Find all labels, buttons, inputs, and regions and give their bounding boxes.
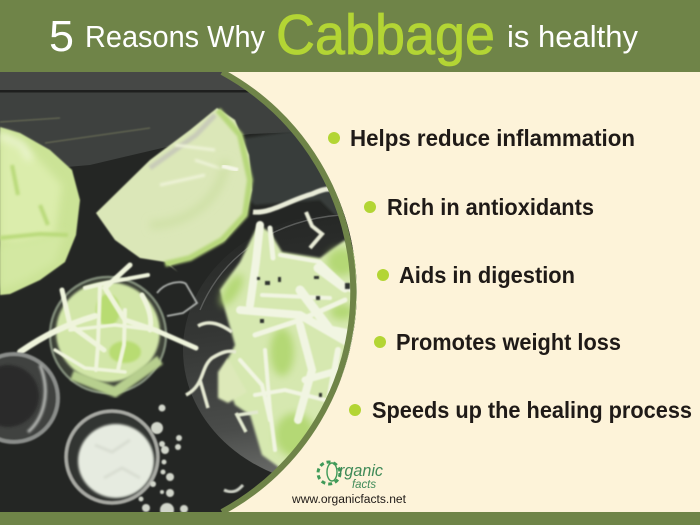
title: is healthy: is healthy bbox=[507, 19, 638, 54]
logo wordmark: rganic bbox=[339, 461, 383, 480]
salt bowl bbox=[66, 411, 158, 503]
bottom bar bbox=[0, 512, 700, 525]
plate bbox=[183, 214, 357, 472]
cabbage wedge bbox=[96, 108, 252, 272]
empty glass jar bbox=[0, 354, 58, 442]
logo: Organic Facts bbox=[318, 461, 383, 491]
cabbage head bbox=[0, 127, 80, 295]
photo: cabbage on slate bbox=[0, 72, 357, 512]
jar of shredded cabbage bbox=[20, 265, 197, 393]
benefit 2: Rich in antioxidants bbox=[387, 194, 594, 220]
benefit 3: Aids in digestion bbox=[399, 262, 575, 288]
title: Cabbage: Cabbage bbox=[276, 3, 495, 67]
logo tagline: facts bbox=[352, 477, 376, 491]
benefit 4: Promotes weight loss bbox=[396, 329, 621, 355]
spilled salt bbox=[138, 404, 188, 517]
wooden board bbox=[0, 72, 348, 228]
title: 5: 5 bbox=[49, 12, 74, 61]
title: Reasons Why: Reasons Why bbox=[85, 19, 265, 54]
curved olive border bbox=[222, 72, 353, 512]
shredded cabbage on plate bbox=[186, 189, 362, 492]
website url: www.organicfacts.net bbox=[291, 494, 407, 506]
title bar bbox=[0, 0, 700, 72]
icon: leaf ring bbox=[318, 462, 340, 484]
benefit 1: Helps reduce inflammation bbox=[350, 125, 635, 151]
